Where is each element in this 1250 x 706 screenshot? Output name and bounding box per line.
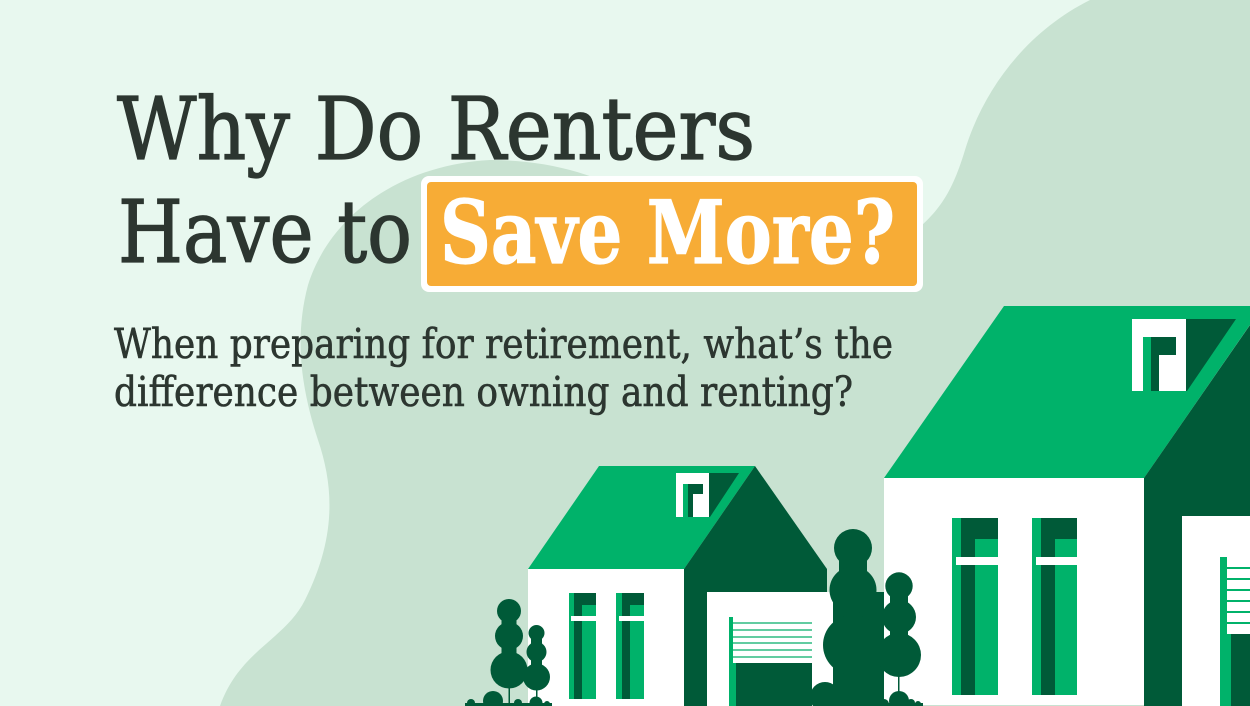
large house bbox=[884, 306, 1250, 706]
subtitle: When preparing for retirement, what’s the bbox=[114, 320, 893, 368]
side gable bbox=[684, 466, 827, 706]
window right bbox=[1032, 518, 1077, 695]
trees and shrubs bbox=[465, 529, 923, 706]
highlighted badge: Save More?: Save More? bbox=[440, 181, 895, 284]
shrub: centre bbox=[810, 682, 840, 706]
subtitle bbox=[114, 320, 893, 416]
dormer window bbox=[1132, 319, 1236, 391]
wall bbox=[528, 569, 684, 706]
roof bbox=[884, 306, 1250, 478]
small house bbox=[528, 466, 833, 706]
window left bbox=[952, 518, 998, 695]
title line 1: Why Do Renters bbox=[117, 80, 755, 180]
side gable bbox=[1144, 325, 1250, 706]
shrub: right bbox=[879, 691, 923, 706]
tree: left tall bbox=[490, 599, 528, 704]
tree: right bbox=[877, 572, 921, 700]
window right bbox=[616, 593, 644, 699]
subtitle: difference between owning and renting? bbox=[114, 368, 853, 416]
garage bbox=[707, 592, 833, 706]
garage bbox=[1182, 516, 1250, 706]
tree: left small bbox=[523, 625, 550, 705]
shrub: left bbox=[465, 691, 552, 706]
window left bbox=[569, 593, 596, 699]
roof bbox=[528, 466, 755, 569]
title line 2: Have to bbox=[118, 183, 412, 283]
wall bbox=[884, 478, 1144, 705]
dormer window bbox=[676, 473, 739, 517]
tree: large centre bbox=[823, 529, 884, 706]
